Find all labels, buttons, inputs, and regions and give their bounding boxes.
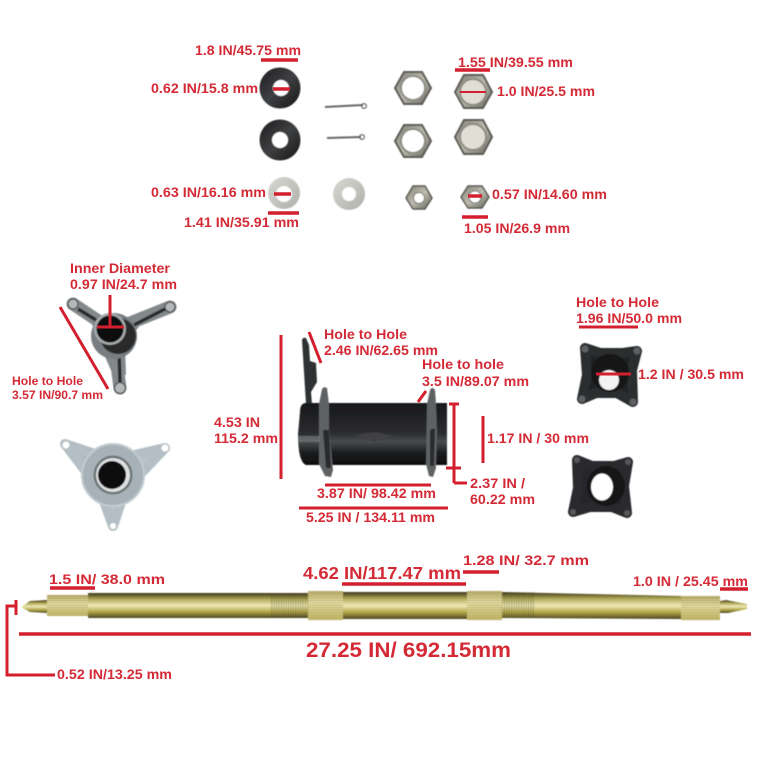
labels: shaft dimensions: 0.52 IN/13.25 mm (57, 667, 172, 682)
labels: hardware dimensions: 1.0 IN/25.5 mm (497, 84, 595, 99)
labels: shaft dimensions (49, 553, 748, 682)
labels: hardware dimensions (151, 43, 607, 236)
labels: sleeve dimensions: 2.37 IN / (470, 476, 525, 491)
icon: castle nut middle right (455, 120, 492, 154)
labels: shaft dimensions: 4.62 IN/117.47 mm (303, 563, 461, 583)
labels: sleeve dimensions: 115.2 mm (214, 431, 278, 446)
icon: flat washer right (333, 178, 365, 210)
labels: hardware dimensions: 0.62 IN/15.8 mm (151, 81, 258, 96)
labels: sleeve dimensions: 3.87 IN/ 98.42 mm (317, 486, 436, 501)
icon: four-bolt hub top (578, 346, 640, 406)
icon: small nut right (461, 186, 489, 208)
labels: sleeve dimensions: Hole to hole (422, 357, 505, 372)
icon: cotter pin top (325, 104, 366, 108)
labels: sleeve dimensions: 60.22 mm (470, 492, 535, 507)
icon: splined axle shaft (21, 591, 747, 620)
labels: sleeve dimensions: 5.25 IN / 134.11 mm (306, 510, 435, 525)
labels: sleeve dimensions: Hole to Hole (324, 327, 408, 342)
labels: hardware dimensions: 1.8 IN/45.75 mm (195, 43, 301, 58)
icon: three-arm flange silver (62, 442, 168, 529)
labels: hardware dimensions: 1.05 IN/26.9 mm (464, 221, 570, 236)
labels: three-arm flange dimensions: Inner Diameter (70, 261, 171, 276)
icon: small nut left (406, 186, 432, 209)
icon: cotter pin lower (327, 135, 364, 139)
panel: hardware set (260, 68, 492, 210)
labels: sleeve dimensions: 1.17 IN / 30 mm (487, 431, 589, 446)
icon: black washer lower (260, 120, 300, 160)
labels: hardware dimensions: 1.55 IN/39.55 mm (458, 55, 573, 70)
labels: shaft dimensions: 1.5 IN/ 38.0 mm (49, 572, 165, 587)
icon: four-bolt hub lower (570, 457, 631, 516)
labels: hardware dimensions: 0.57 IN/14.60 mm (492, 187, 607, 202)
icon: castle nut top left (395, 72, 431, 104)
labels: three-arm flange dimensions: 3.57 IN/90.7 mm (12, 389, 103, 402)
labels: three-arm flange dimensions: 0.97 IN/24.7 mm (70, 277, 177, 292)
labels: sleeve dimensions: 2.46 IN/62.65 mm (324, 343, 438, 358)
labels: hardware dimensions: 0.63 IN/16.16 mm (151, 185, 266, 200)
labels: shaft dimensions: 1.0 IN / 25.45 mm (633, 574, 748, 589)
labels: hub dimensions: 1.2 IN / 30.5 mm (638, 367, 744, 382)
labels: sleeve dimensions: 4.53 IN (214, 415, 260, 430)
dimension lines (7, 60, 751, 675)
labels: sleeve dimensions: 3.5 IN/89.07 mm (422, 374, 529, 389)
labels: shaft dimensions: 27.25 IN/ 692.15mm (306, 638, 511, 662)
icon: three-arm flange dark (68, 299, 175, 394)
labels: sleeve dimensions (214, 327, 589, 525)
icon: flat washer left (268, 177, 300, 209)
icon: black washer top (260, 68, 300, 108)
labels: hub dimensions: Hole to Hole (576, 295, 660, 310)
icon: sleeve with plates (298, 338, 447, 477)
icon: castle nut middle left (395, 125, 431, 157)
icon: castle nut top right (455, 75, 492, 108)
labels: hub dimensions (576, 295, 744, 382)
labels: three-arm flange dimensions: Hole to Hole (12, 375, 84, 388)
labels: shaft dimensions: 1.28 IN/ 32.7 mm (463, 553, 589, 568)
labels: hub dimensions: 1.96 IN/50.0 mm (576, 311, 682, 326)
labels: three-arm flange dimensions (12, 261, 177, 402)
labels: hardware dimensions: 1.41 IN/35.91 mm (184, 215, 299, 230)
